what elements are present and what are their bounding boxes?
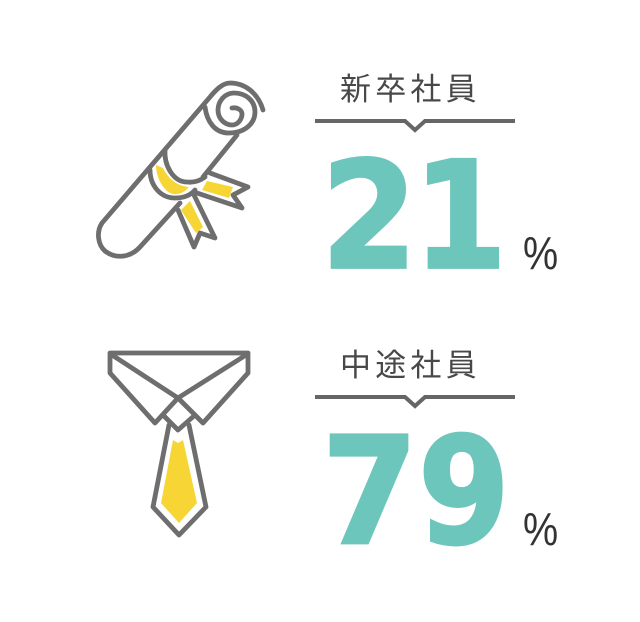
number: 21: 1 <box>413 130 507 303</box>
number: 79: 7 <box>322 405 418 578</box>
label: mid-career hires: 中途社員 <box>340 348 481 383</box>
percent sign: new graduates: % <box>523 228 558 280</box>
number: 79 <box>322 405 510 579</box>
divider with notch: new graduates <box>315 121 515 130</box>
divider with notch: mid-career hires <box>315 397 515 406</box>
number: 21: 2 <box>321 130 417 303</box>
percent sign: mid-career hires: % <box>523 504 558 556</box>
icon: diploma scroll <box>98 83 263 256</box>
icon: collar and necktie <box>110 353 248 535</box>
number: 21 <box>321 130 507 303</box>
number: 79: 9 <box>418 407 510 579</box>
label: new graduates: 新卒社員 <box>340 72 481 107</box>
